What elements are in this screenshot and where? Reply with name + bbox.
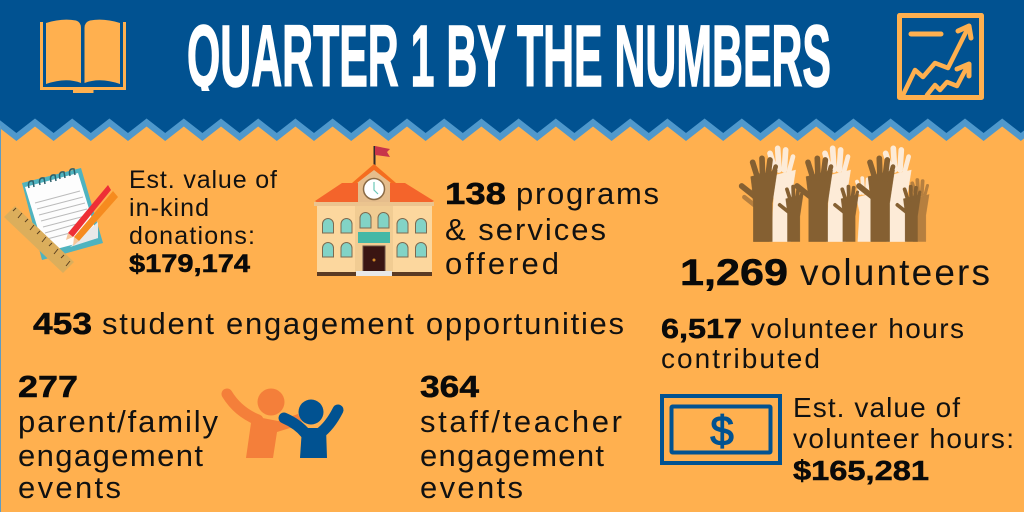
text: volunteer hours: 6,517 [661,313,742,344]
text: in-kind donations: Est. value of [129,166,277,194]
text: programs and services [445,176,659,281]
text: student engagement: student engagement opportunities [102,306,624,341]
text: value of volunteer hours: Est. value of [793,392,960,423]
text: in-kind donations [129,166,277,278]
text: programs and services: programs [516,176,659,211]
text: staff/teacher events: 364 [420,369,480,404]
text: staff/teacher events: events [420,470,523,505]
text: value of volunteer hours [793,392,1014,486]
text: staff/teacher events: staff/teacher [420,404,622,439]
text: volunteers: volunteers [800,252,990,293]
text: student engagement: 453 [33,306,92,341]
icon: rising chart [900,16,982,98]
text: programs and services: 138 [445,176,506,211]
text: parent/family events: engagement [18,438,203,473]
text: programs and services: & services [445,212,606,247]
text: in-kind donations: donations: [129,222,255,250]
text: volunteer hours: volunteer hours [751,313,964,344]
icon: parent and child [227,388,338,458]
left edge line [0,126,1,512]
text: staff/teacher events: engagement [420,438,604,473]
text: in-kind donations: $179,174 [129,250,250,278]
icon: dollar bill [662,396,780,463]
text: volunteer hours: contributed [661,343,820,374]
text: parent/family events [18,369,218,505]
text: staff/teacher events [420,369,622,505]
text: parent/family events: parent/family [18,404,218,439]
icon: raised hands [742,148,929,242]
text: programs and services: offered [445,246,559,281]
header band with zigzag edge [0,0,1024,137]
text: value of volunteer hours: $165,281 [793,455,929,486]
text: volunteer hours [661,313,964,374]
text: volunteers [680,252,990,293]
icon: notepad, pencils and ruler [4,168,118,273]
text: value of volunteer hours: volunteer hours: [793,423,1014,454]
icon: dollar bill: $ [710,407,734,454]
text: parent/family events: 277 [18,369,78,404]
text: in-kind donations: in-kind [129,194,209,222]
icon: open book [40,20,126,93]
text: parent/family events: events [18,470,121,505]
text: volunteers: 1,269 [680,252,788,293]
icon: school building [314,146,434,276]
